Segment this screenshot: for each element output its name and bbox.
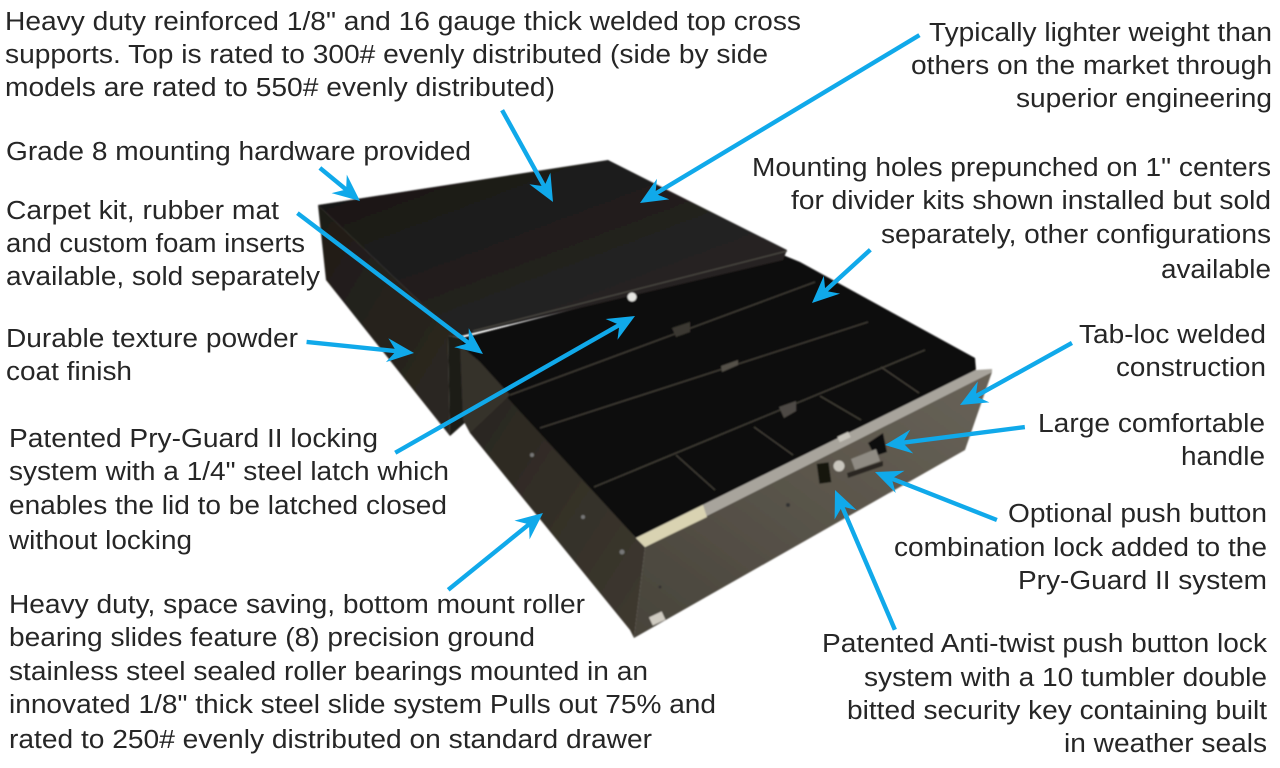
text: tab-loc	[1079, 321, 1266, 382]
text: mounting holes: separately, other configurations	[881, 221, 1271, 249]
arrow: to handle	[883, 415, 1026, 457]
handle and locks	[530, 432, 887, 625]
text: tab-loc: construction	[1116, 354, 1266, 382]
arrow: to case side	[305, 330, 415, 365]
callout: mounting hardware	[6, 138, 471, 210]
text: carpet kit: Carpet kit, rubber mat	[6, 197, 279, 225]
text: top supports: supports. Top is rated to 300# evenly distributed (side by side	[5, 41, 768, 69]
text: top supports: Heavy duty reinforced 1/8" and 16 gauge thick welded top cross	[5, 8, 801, 36]
text: handle	[1038, 410, 1265, 471]
text: combination lock: combination lock added to the	[894, 534, 1267, 562]
text: carpet kit: and custom foam inserts	[6, 230, 305, 258]
callout: handle	[883, 410, 1265, 471]
product photo: open drawer unit	[318, 160, 992, 638]
text: lighter weight: superior engineering	[1016, 85, 1272, 113]
text: combination lock: Pry-Guard II system	[1018, 567, 1267, 595]
text: Pry-Guard II	[8, 425, 449, 555]
text: combination lock	[894, 500, 1267, 595]
callout: anti-twist lock	[822, 485, 1267, 758]
text: mounting holes: for divider kits shown installed but sold	[791, 187, 1271, 215]
text: roller bearing slides: innovated 1/8" thick steel slide system Pulls out 75% and	[9, 691, 716, 719]
text: roller bearing slides: rated to 250# evenly distributed on standard drawer	[9, 726, 653, 754]
drawer top rim	[636, 369, 992, 547]
text: mounting holes: Mounting holes prepunched on 1" centers	[752, 154, 1271, 182]
text: powder coat	[6, 325, 299, 386]
text: carpet kit	[6, 197, 320, 291]
text: powder coat: coat finish	[6, 358, 132, 386]
text: roller bearing slides: bearing slides feature (8) precision ground	[9, 624, 535, 652]
lid latch	[628, 292, 636, 302]
text: anti-twist lock: system with a 10 tumbler double	[864, 664, 1267, 692]
text: roller bearing slides: stainless steel sealed roller bearings mounted in an	[9, 658, 648, 686]
text: lighter weight: others on the market through	[911, 52, 1272, 80]
drawer interior	[462, 255, 976, 538]
text: anti-twist lock: bitted security key containing built	[847, 697, 1267, 725]
callout: welded top cross supports	[5, 8, 801, 208]
text: anti-twist lock: in weather seals	[1064, 730, 1267, 758]
text: anti-twist lock: Patented Anti-twist push button lock	[822, 630, 1267, 658]
text: carpet kit: available, sold separately	[6, 263, 320, 291]
arrow: to case corner	[312, 159, 368, 210]
arrow: to lid top	[492, 104, 563, 208]
text: grade 8 hardware: Grade 8 mounting hardware provided	[6, 138, 471, 166]
callout: mounting holes	[752, 154, 1271, 312]
callout: roller bearing slides	[9, 504, 716, 754]
text: mounting holes	[752, 154, 1271, 284]
arrow: to combination lock	[871, 461, 1001, 531]
text: handle: handle	[1181, 443, 1265, 471]
text: Pry-Guard II: Patented Pry-Guard II locking	[9, 425, 378, 453]
callout: tab-loc construction	[954, 321, 1266, 415]
callout: lighter weight	[634, 19, 1272, 213]
lid	[318, 160, 787, 337]
text: tab-loc: Tab-loc welded	[1079, 321, 1266, 349]
text: Pry-Guard II: enables the lid to be latched closed	[9, 492, 447, 520]
text: top supports	[5, 8, 801, 102]
text: Pry-Guard II: system with a 1/4" steel latch which	[9, 458, 449, 486]
arrow: to latch	[389, 306, 641, 463]
arrow: to lid	[634, 25, 926, 213]
drawer side panel	[458, 352, 645, 638]
text: roller bearing slides: Heavy duty, space saving, bottom mount roller	[9, 591, 586, 619]
text: Pry-Guard II: without locking	[8, 527, 192, 555]
arrow: to key lock	[824, 485, 906, 634]
drawer dividers and compartments	[510, 282, 925, 490]
callout: powder coat	[6, 325, 415, 386]
text: handle: Large comfortable	[1038, 410, 1265, 438]
text: powder coat: Durable texture powder	[6, 325, 299, 353]
arrow: to divider	[804, 241, 878, 312]
case side	[318, 205, 457, 436]
text: combination lock: Optional push button	[1008, 500, 1267, 528]
text: lighter weight: Typically lighter weight than	[929, 19, 1272, 47]
text: roller bearing slides	[9, 591, 716, 754]
callout: Pry-Guard II latch	[8, 306, 641, 555]
text: mounting holes: available	[1161, 256, 1271, 284]
drawer front panel	[634, 372, 992, 638]
text: lighter weight	[911, 19, 1272, 113]
arrow: to drawer front corner	[954, 332, 1078, 415]
arrow: to drawer interior	[290, 204, 490, 364]
text: anti-twist lock	[822, 630, 1267, 758]
text: top supports: models are rated to 550# evenly distributed)	[5, 74, 555, 102]
callout: carpet kit	[6, 197, 490, 364]
callout: combination lock	[871, 461, 1267, 595]
arrow: to drawer side	[441, 504, 551, 599]
